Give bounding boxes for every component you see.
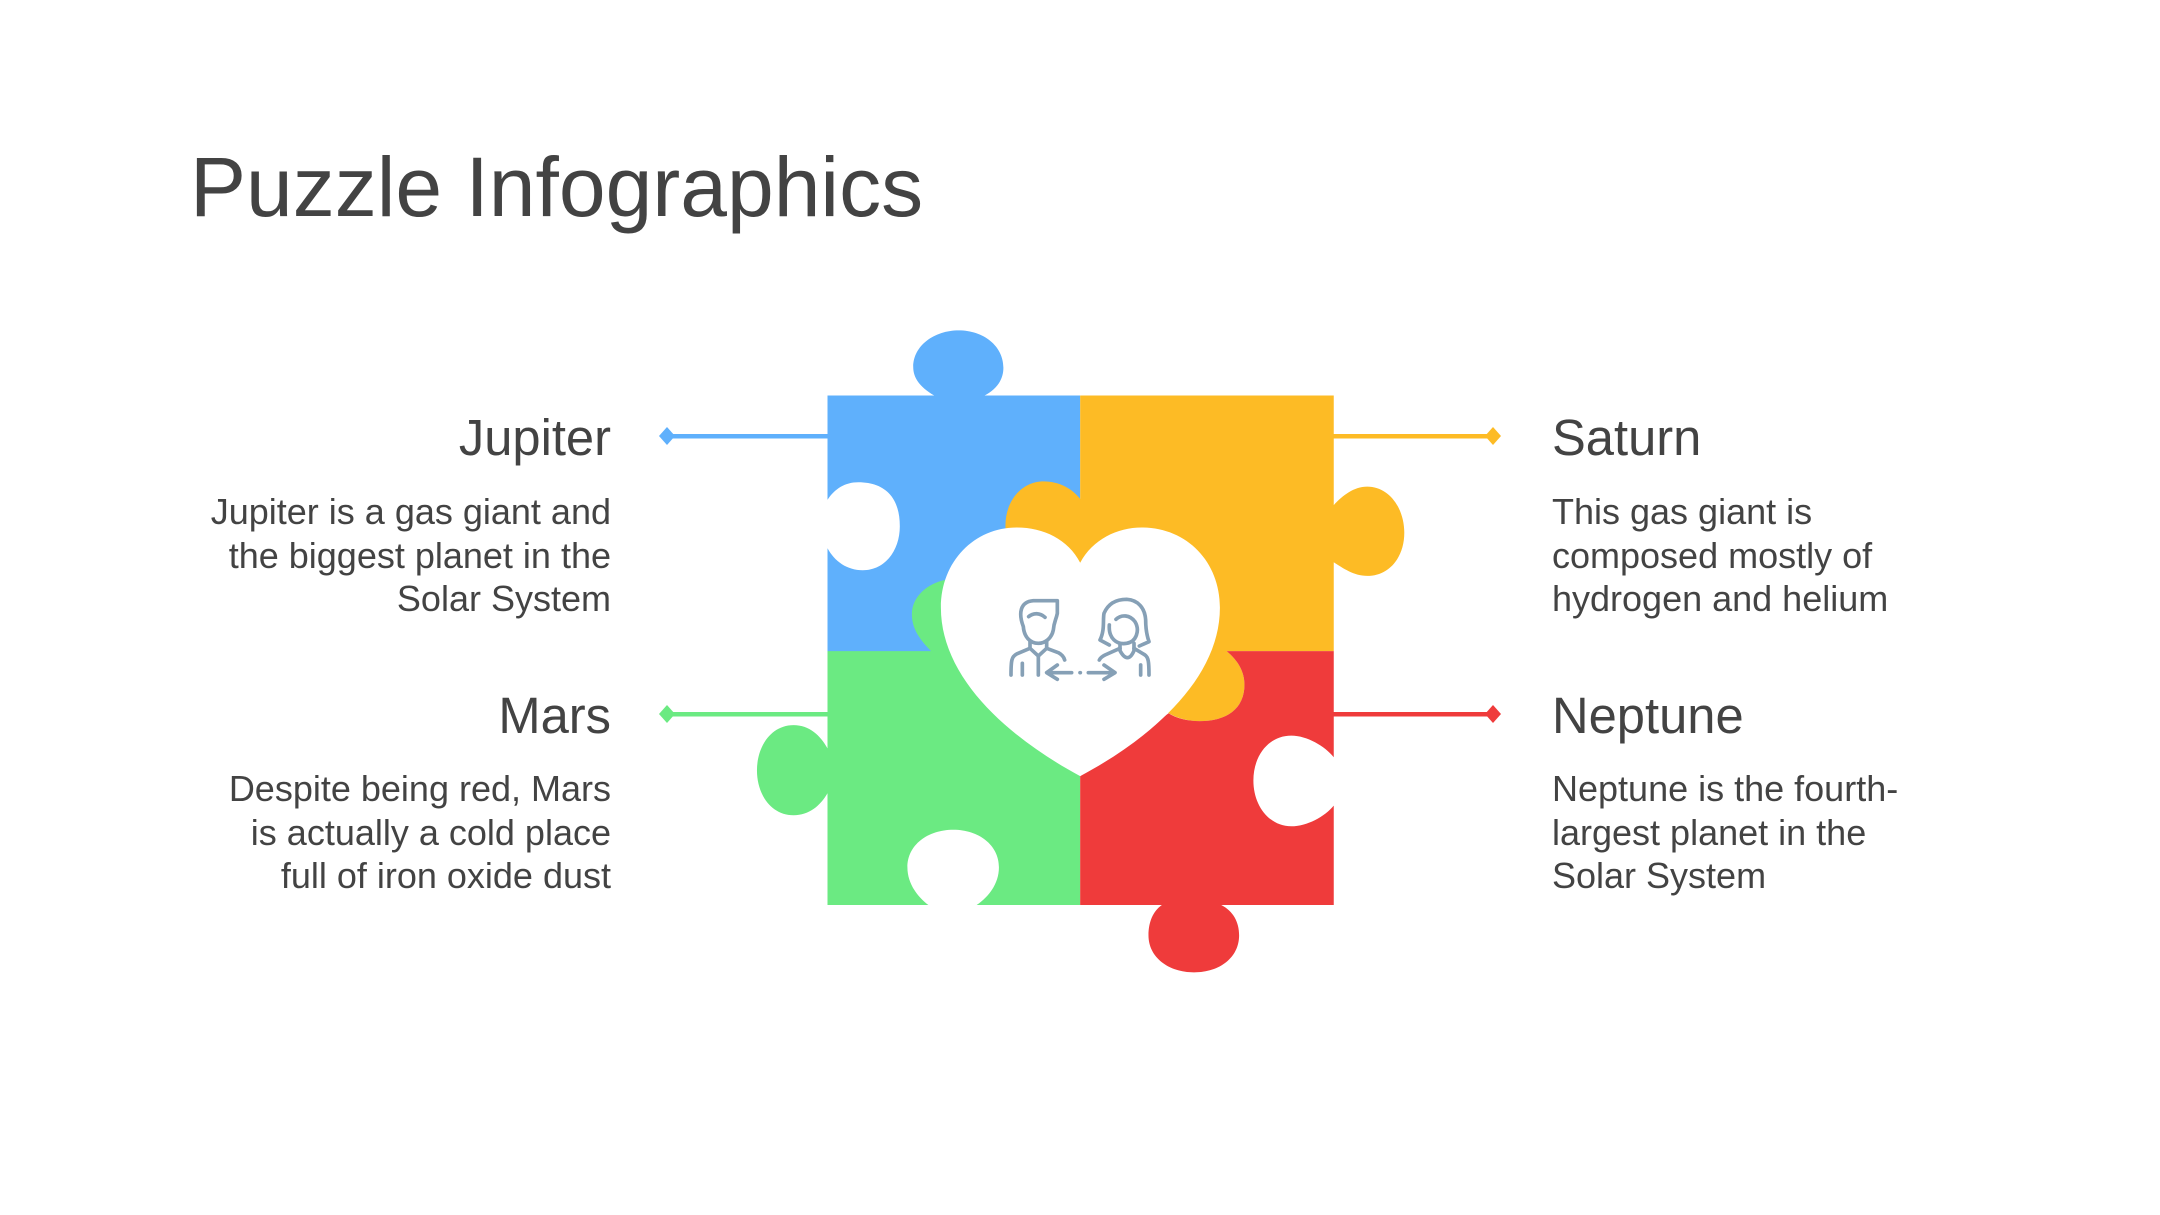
heading: Neptune: Neptune: [1552, 687, 1744, 744]
connector: Mars: [659, 705, 832, 723]
puzzle piece: green: [757, 580, 1080, 905]
heading: Saturn: Saturn: [1552, 409, 1701, 466]
text: Mars description: [229, 768, 611, 896]
title: Puzzle Infographics: [190, 140, 923, 234]
puzzle piece: yellow: [1005, 396, 1404, 721]
heading: Jupiter: Jupiter: [459, 409, 611, 466]
connector: Saturn: [1330, 427, 1501, 445]
text: Saturn description: composed mostly of: [1552, 535, 1872, 576]
text: Neptune description: Solar System: [1552, 855, 1766, 896]
text: Mars description: full of iron oxide dust: [281, 855, 611, 896]
text: Jupiter description: [211, 491, 611, 619]
text: Jupiter description: Jupiter is a gas giant and: [211, 491, 611, 532]
text: Jupiter description: the biggest planet in the: [229, 535, 611, 576]
text: Jupiter description: Solar System: [397, 578, 611, 619]
text: Mars description: is actually a cold place: [251, 812, 611, 853]
connector: Jupiter: [659, 427, 832, 445]
text: Saturn description: hydrogen and helium: [1552, 578, 1888, 619]
text: Neptune description: [1552, 768, 1898, 896]
icon: man and woman with arrows: [1011, 599, 1149, 679]
heart: [941, 528, 1220, 776]
puzzle piece: red: [1080, 651, 1334, 972]
connector: Neptune: [1330, 705, 1501, 723]
text: Neptune description: Neptune is the fourth-: [1552, 768, 1898, 809]
text: Saturn description: [1552, 491, 1888, 619]
text: Neptune description: largest planet in the: [1552, 812, 1866, 853]
text: Saturn description: This gas giant is: [1552, 491, 1812, 532]
text: Mars description: Despite being red, Mars: [229, 768, 611, 809]
heading: Mars: Mars: [498, 687, 611, 744]
puzzle piece: blue: [828, 330, 1080, 654]
